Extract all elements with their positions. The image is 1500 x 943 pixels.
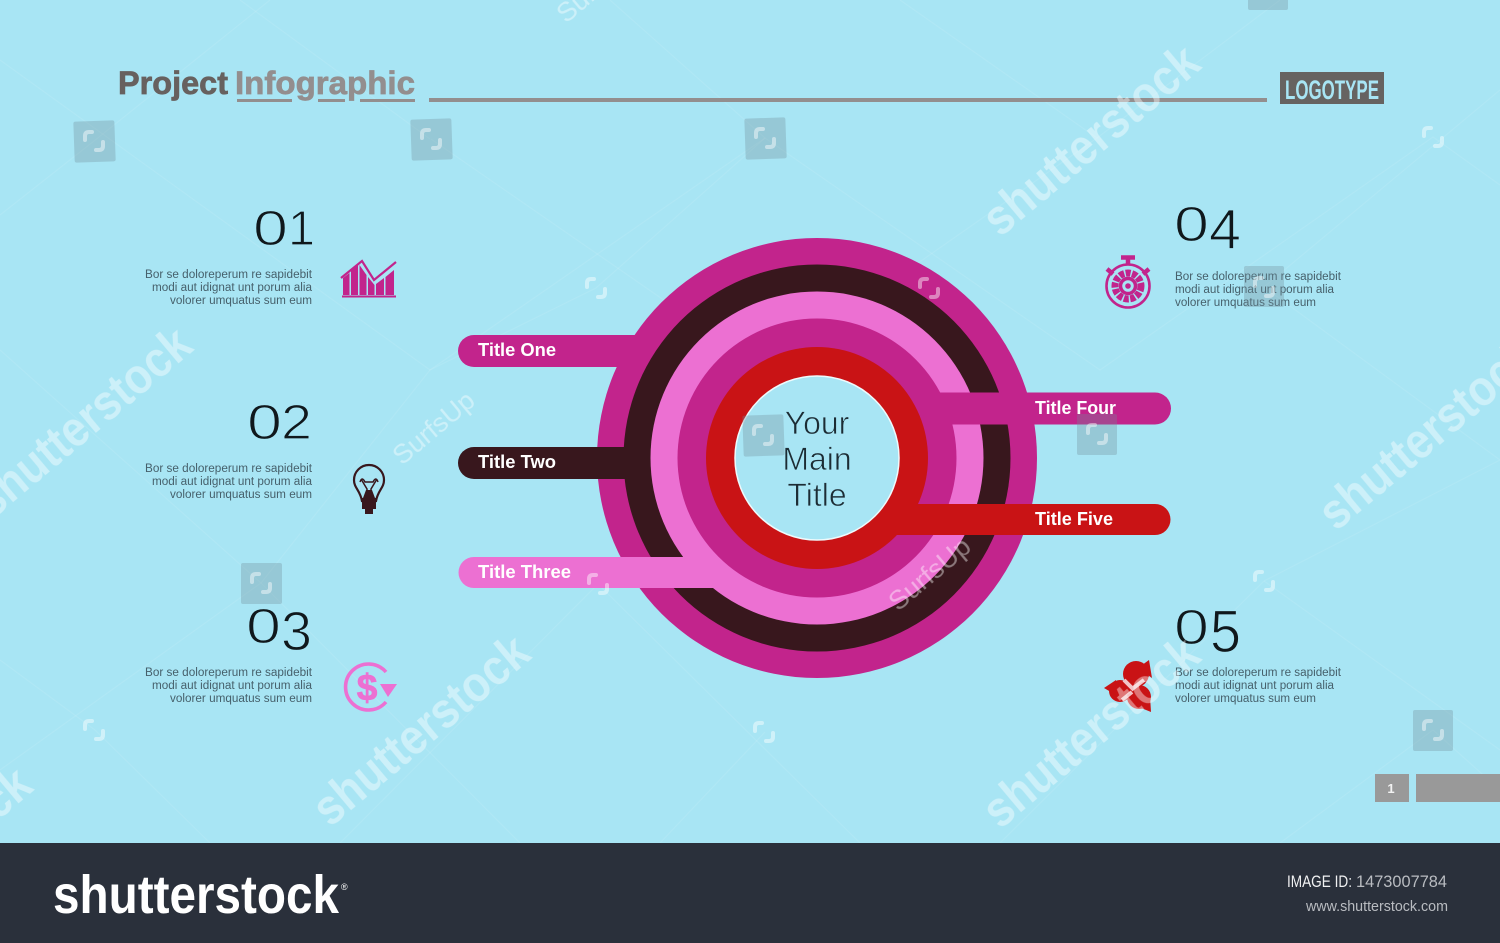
item 04: 4 <box>1209 198 1241 262</box>
item 02: 0 <box>247 396 282 450</box>
description 02: Bor se doloreperum re sapidebit <box>145 463 313 475</box>
bar: title two <box>458 447 640 479</box>
website: www.shutterstock.com <box>1305 899 1448 915</box>
item 02 <box>145 396 384 514</box>
description 05 <box>1175 667 1342 705</box>
centre title: Title <box>787 477 847 513</box>
bar: title three <box>458 557 730 588</box>
title: Infographic <box>235 65 415 101</box>
description 02: volorer umquatus sum eum <box>170 489 312 501</box>
bar: title three: Title Three <box>478 562 571 582</box>
logotype <box>1280 72 1384 105</box>
title <box>118 65 415 101</box>
bar: title five <box>880 504 1170 535</box>
ring three <box>650 292 984 624</box>
description 03: volorer umquatus sum eum <box>170 693 312 705</box>
description 01: modi aut idignat unt porum alia <box>152 282 313 294</box>
page number: 1 <box>1387 781 1395 796</box>
item 01: 0 <box>253 202 288 256</box>
icon: dollar cycle: $ <box>357 667 378 708</box>
bar: title two: Title Two <box>478 452 556 472</box>
image id: IMAGE ID: <box>1287 872 1352 891</box>
description 01: volorer umquatus sum eum <box>170 295 312 307</box>
icon: bar chart <box>341 261 396 298</box>
description 05: volorer umquatus sum eum <box>1175 693 1316 705</box>
page tab <box>1416 774 1500 802</box>
watermark overlay: shutterstock <box>971 625 1210 838</box>
ring five <box>706 347 928 569</box>
bar: title four <box>920 392 1171 424</box>
icon: light bulb <box>354 465 384 514</box>
watermark overlay: SurfsUp <box>883 531 977 617</box>
item 03 <box>145 600 397 710</box>
description 05: modi aut idignat unt porum alia <box>1175 680 1335 692</box>
item 03: 3 <box>281 600 312 662</box>
bar: title five: Title Five <box>1035 509 1113 529</box>
centre title <box>782 405 852 513</box>
centre title: Main <box>782 441 852 477</box>
description 05: Bor se doloreperum re sapidebit <box>1175 667 1342 679</box>
item 05 <box>1104 598 1342 712</box>
description 03 <box>145 667 313 705</box>
bar: title one <box>458 335 650 367</box>
item 03: 0 <box>246 600 281 654</box>
concentric ring chart <box>458 238 1171 678</box>
description 03: Bor se doloreperum re sapidebit <box>145 667 313 679</box>
page number <box>1375 774 1409 802</box>
description 04: modi aut idignat unt porum alia <box>1175 284 1335 296</box>
description 02: modi aut idignat unt porum alia <box>152 476 313 488</box>
header rule <box>429 98 1267 102</box>
ring two <box>624 264 1010 652</box>
icon: red trefoil <box>1104 660 1152 712</box>
icon: dollar cycle <box>346 664 397 710</box>
watermark overlay: SurfsUp <box>387 385 481 471</box>
title: Project <box>118 65 228 101</box>
image id: 1473007784 <box>1356 872 1447 891</box>
item 01 <box>145 202 396 307</box>
description 01 <box>145 269 313 307</box>
ring one <box>597 238 1037 678</box>
item 04 <box>1106 198 1342 309</box>
description 02 <box>145 463 313 501</box>
ring four <box>678 318 956 598</box>
centre title: Your <box>785 405 850 441</box>
bar: title four: Title Four <box>1035 398 1116 418</box>
bar: title one: Title One <box>478 340 556 360</box>
footer bar <box>0 843 1500 943</box>
description 04 <box>1175 271 1342 309</box>
description 01: Bor se doloreperum re sapidebit <box>145 269 313 281</box>
item 04: 0 <box>1174 198 1209 252</box>
item 05: 0 <box>1174 601 1209 655</box>
item 02: 2 <box>281 396 312 450</box>
description 04: Bor se doloreperum re sapidebit <box>1175 271 1342 283</box>
watermark overlay: shutterstock <box>301 623 540 836</box>
shutterstock logo: shutterstock <box>53 865 340 925</box>
item 05: 5 <box>1210 598 1241 665</box>
shutterstock logo: ® <box>341 882 348 892</box>
description 04: volorer umquatus sum eum <box>1175 297 1316 309</box>
centre circle <box>735 376 899 540</box>
description 03: modi aut idignat unt porum alia <box>152 680 313 692</box>
item 01: 1 <box>288 202 315 256</box>
logotype: LOGOTYPE <box>1285 75 1379 105</box>
image id <box>1287 872 1447 891</box>
icon: stopwatch gear <box>1106 257 1150 308</box>
watermark overlay: shutterstock <box>971 33 1210 246</box>
